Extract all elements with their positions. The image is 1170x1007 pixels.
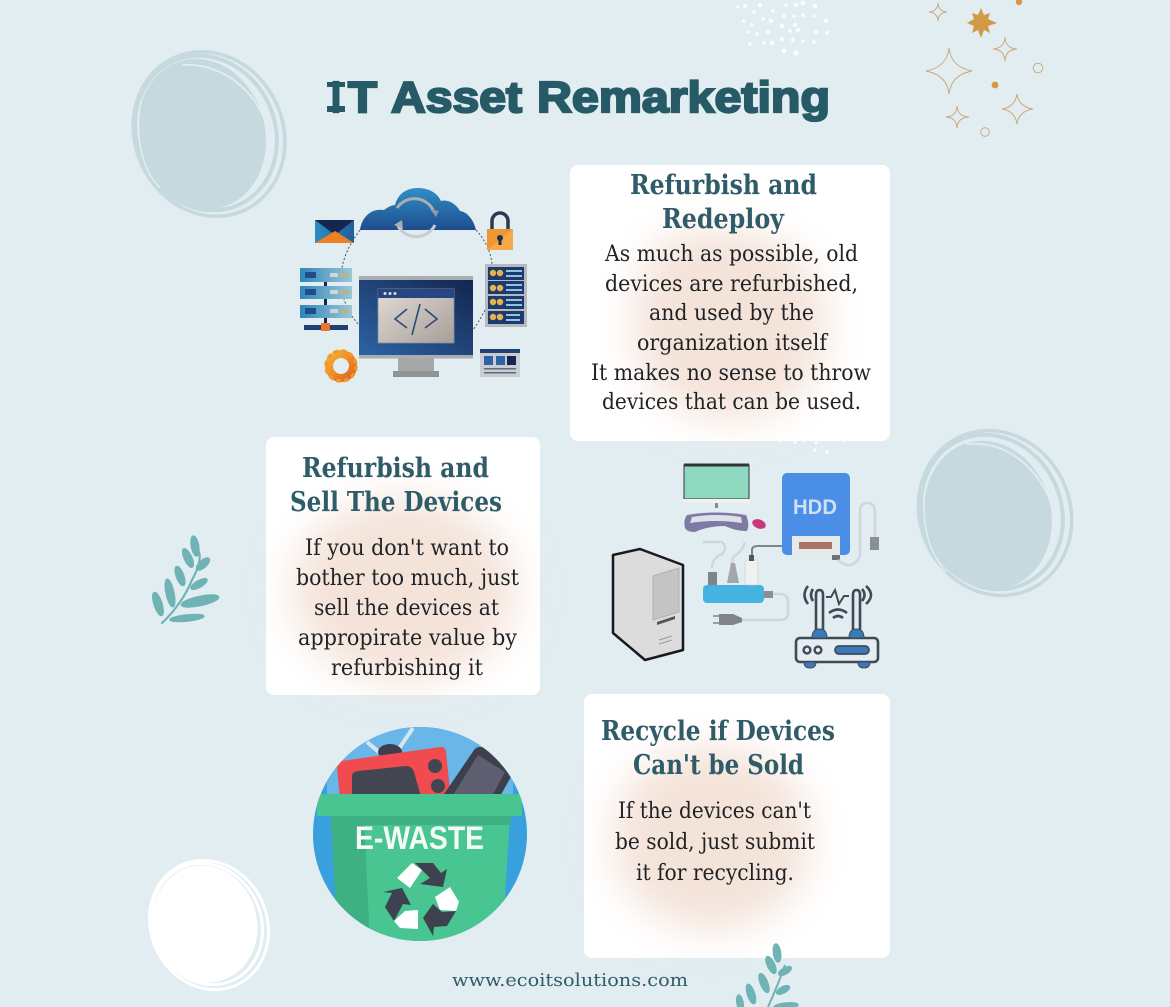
dotted connectors bbox=[342, 230, 492, 330]
heading bbox=[290, 453, 502, 518]
icon: phone bbox=[444, 746, 511, 794]
decorative scribble circle: right bbox=[892, 405, 1098, 621]
icon: left server stack bbox=[300, 268, 352, 331]
body text: organization itself bbox=[637, 330, 829, 356]
icon: padlock bbox=[487, 213, 513, 250]
body text: appropirate value by bbox=[298, 625, 517, 651]
heading: Refurbish and bbox=[302, 453, 489, 484]
decorative leaf: left bbox=[151, 536, 220, 623]
heading: Redeploy bbox=[662, 204, 785, 235]
body text: devices that can be used. bbox=[602, 389, 861, 415]
cables bbox=[703, 503, 875, 620]
icon: hdd: HDD bbox=[793, 496, 837, 519]
icon: desktop monitor bbox=[683, 464, 750, 508]
title: T bbox=[348, 73, 377, 122]
decorative sparkles: top right bbox=[926, 0, 1043, 136]
body text: sell the devices at bbox=[314, 595, 499, 621]
heading: Sell The Devices bbox=[290, 487, 502, 518]
panel: recycle if devices can't be sold bbox=[584, 694, 890, 958]
decorative leaf: bottom bbox=[736, 944, 798, 1007]
body text: refurbishing it bbox=[331, 655, 483, 681]
panel: refurbish and sell the devices bbox=[266, 437, 540, 695]
icon: envelope bbox=[315, 220, 354, 243]
icon: wifi router bbox=[796, 586, 878, 668]
body text: If the devices can't bbox=[618, 798, 811, 824]
bin rim bbox=[317, 794, 522, 816]
illustration: e-waste bin bbox=[313, 715, 527, 945]
icon: cloud bbox=[360, 188, 476, 230]
bin body bbox=[332, 825, 510, 941]
icon: mouse bbox=[751, 517, 767, 531]
icon: sync arrows bbox=[394, 199, 439, 237]
heading: Can't be Sold bbox=[633, 750, 804, 781]
icon: plug bbox=[713, 614, 742, 625]
watercolor blot bbox=[632, 230, 828, 420]
icon: small browser window bbox=[480, 349, 520, 377]
icon: main monitor bbox=[359, 276, 473, 377]
panel: refurbish and redeploy bbox=[570, 165, 890, 441]
watercolor blot bbox=[612, 746, 812, 930]
body text: bother too much, just bbox=[296, 565, 519, 591]
heading bbox=[630, 170, 817, 235]
body text bbox=[591, 241, 871, 415]
decorative dots below panel bbox=[779, 439, 845, 454]
body text bbox=[296, 535, 519, 681]
title: Asset bbox=[391, 73, 522, 122]
heading bbox=[601, 716, 835, 781]
body text: It makes no sense to throw bbox=[591, 360, 871, 386]
icon: gear bbox=[326, 351, 356, 381]
icon: pc tower bbox=[613, 549, 683, 660]
illustration: cloud network and monitor bbox=[300, 188, 527, 381]
icon: recycle symbol bbox=[383, 863, 459, 936]
body text: If you don't want to bbox=[305, 535, 509, 561]
icon: television bbox=[337, 728, 513, 800]
body text: As much as possible, old bbox=[604, 241, 858, 267]
icon: right server rack bbox=[485, 264, 527, 327]
body text: it for recycling. bbox=[636, 860, 794, 886]
icon: keyboard bbox=[684, 512, 748, 532]
illustration: computer hardware bbox=[613, 464, 879, 668]
heading: Refurbish and bbox=[630, 170, 817, 201]
decorative dots: top bbox=[736, 1, 829, 56]
footer url: www.ecoitsolutions.com bbox=[452, 970, 688, 991]
heading: Recycle if Devices bbox=[601, 716, 835, 747]
title: Remarketing bbox=[537, 73, 830, 122]
title bbox=[327, 73, 830, 122]
body text: be sold, just submit bbox=[615, 829, 815, 855]
code glyph bbox=[395, 304, 437, 335]
body text: and used by the bbox=[649, 300, 814, 326]
decorative scribble circle: white bbox=[129, 841, 289, 1007]
watercolor blot bbox=[292, 498, 516, 682]
icon: hdd bbox=[782, 473, 850, 560]
title: I bbox=[331, 73, 341, 122]
body text: devices are refurbished, bbox=[605, 271, 858, 297]
icon: power strip bbox=[703, 555, 773, 603]
body text bbox=[615, 798, 815, 886]
decorative scribble circle: top left bbox=[106, 27, 312, 241]
bin label: E-WASTE bbox=[355, 820, 484, 856]
